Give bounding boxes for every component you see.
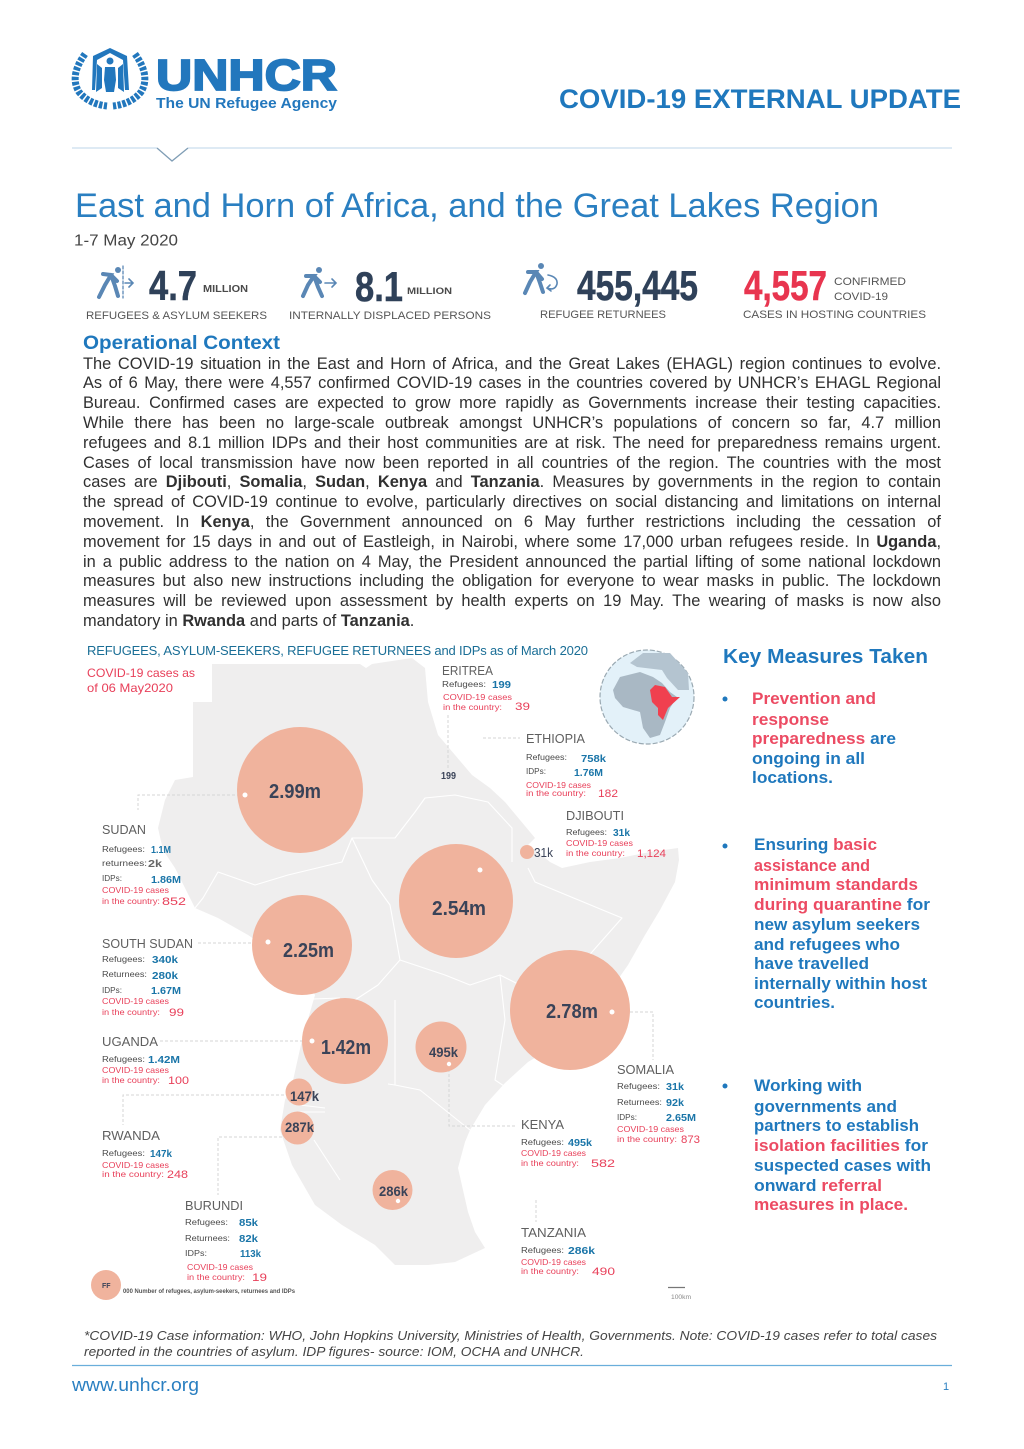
stat: internally displaced persons: MILLION bbox=[407, 286, 452, 296]
measure 2: minimum standards bbox=[754, 876, 918, 894]
bubble: South Sudan: 2.25m bbox=[283, 940, 334, 962]
measure 3: Working with bbox=[754, 1077, 862, 1095]
measure 1: response bbox=[752, 711, 829, 729]
measure 1 bbox=[722, 690, 896, 787]
country: Burundi: Refugees: bbox=[185, 1217, 228, 1227]
map legend: 000 Number of refugees, asylum-seekers, returnees and IDPs bbox=[123, 1288, 295, 1295]
country: Tanzania: 490 bbox=[592, 1266, 615, 1278]
country: Uganda: 100 bbox=[168, 1075, 189, 1087]
measure 2: and refugees who bbox=[754, 936, 900, 954]
country: Somalia: COVID-19 cases bbox=[617, 1124, 684, 1134]
map heading: REFUGEES, ASYLUM-SEEKERS, REFUGEE RETURNEES and IDPs as of March 2020 bbox=[87, 643, 588, 658]
country: Ethiopia: ETHIOPIA bbox=[526, 731, 585, 746]
title: East and Horn of Africa, and the Great Lakes Region bbox=[75, 187, 879, 225]
text block: operational context paragraph: refugees and 8.1 million IDPs and their host communities are at risk. The need for preparedness remains urgent. bbox=[83, 434, 941, 452]
stat: confirmed COVID-19 cases: COVID-19 bbox=[834, 291, 888, 303]
country: Burundi: 85k bbox=[239, 1218, 258, 1229]
country: Djibouti: Refugees: bbox=[566, 827, 607, 837]
leader lines bbox=[123, 715, 653, 1222]
country: Tanzania bbox=[521, 1225, 615, 1278]
map: region with bubbles bbox=[123, 658, 679, 1265]
country: Kenya: in the country: bbox=[521, 1158, 579, 1168]
country: Tanzania: COVID-19 cases bbox=[521, 1257, 586, 1267]
measure 2: Ensuring basic bbox=[754, 836, 877, 854]
country: Eritrea bbox=[442, 663, 530, 713]
measure 2: countries. bbox=[754, 994, 835, 1012]
country: Sudan: 852 bbox=[162, 896, 186, 908]
bubble: Djibouti: 31k bbox=[534, 845, 553, 860]
country: Somalia: in the country: bbox=[617, 1134, 677, 1144]
text block: operational context paragraph: in a public address to the nation on 4 May, the President announced the partial lifting of some national lockdown bbox=[83, 553, 941, 571]
country: Tanzania: 286k bbox=[568, 1246, 596, 1257]
footnote: reported in the countries of asylum. IDP figures- source: IOM, OCHA and UNHCR. bbox=[84, 1344, 584, 1359]
heading: key measures: Key Measures Taken bbox=[723, 646, 928, 668]
country: Uganda: COVID-19 cases bbox=[102, 1065, 169, 1075]
country: Somalia: 31k bbox=[666, 1082, 684, 1093]
country: Ethiopia: 182 bbox=[598, 788, 618, 800]
stat: confirmed COVID-19 cases: CASES IN HOSTING COUNTRIES bbox=[743, 309, 926, 321]
stat: refugee returnees bbox=[525, 262, 698, 321]
country: Eritrea: 39 bbox=[515, 701, 530, 713]
map legend bbox=[91, 1270, 295, 1300]
date: 1-7 May 2020 bbox=[74, 232, 178, 250]
stat: internally displaced persons: 8.1 bbox=[355, 263, 403, 310]
measure 3 bbox=[722, 1077, 931, 1214]
country: South Sudan: 1.67M bbox=[151, 986, 181, 997]
country: Kenya: 582 bbox=[591, 1158, 615, 1170]
country: Rwanda: in the country: bbox=[102, 1169, 164, 1179]
bubble: Kenya: 495k bbox=[429, 1044, 458, 1060]
bubble: South Sudan bbox=[252, 895, 352, 995]
measure 1: preparedness are bbox=[752, 730, 896, 748]
country: Ethiopia: Refugees: bbox=[526, 752, 567, 762]
country: Rwanda bbox=[102, 1128, 188, 1181]
country: Uganda: Refugees: bbox=[102, 1054, 145, 1064]
footer url: www.unhcr.org bbox=[71, 1375, 199, 1395]
country: Ethiopia: 1.76M bbox=[574, 768, 603, 779]
stat: internally displaced persons bbox=[289, 263, 491, 322]
country: Sudan: 1.86M bbox=[151, 875, 181, 886]
text block: operational context paragraph: movement. In Kenya, the Government announced on 6 May further restrictions including the cessation of bbox=[83, 513, 941, 531]
country: Somalia: SOMALIA bbox=[617, 1062, 674, 1077]
country: Kenya: Refugees: bbox=[521, 1137, 564, 1147]
country: Sudan: COVID-19 cases bbox=[102, 885, 169, 895]
measure 2: internally within host bbox=[754, 975, 928, 993]
country: Uganda: UGANDA bbox=[102, 1034, 158, 1049]
heading: operational context: Operational Context bbox=[83, 332, 281, 354]
icon: person walking with arrow bbox=[303, 267, 336, 296]
country: Ethiopia: in the country: bbox=[526, 788, 586, 798]
country: Burundi: Returnees: bbox=[185, 1233, 230, 1243]
bubble: Uganda bbox=[302, 998, 388, 1084]
country: South Sudan: COVID-19 cases bbox=[102, 996, 169, 1006]
bubble: Somalia bbox=[510, 950, 630, 1070]
bubble value: Eritrea: 199 bbox=[441, 771, 456, 782]
country: Sudan: 1.1M bbox=[151, 845, 171, 856]
measure 3: partners to establish bbox=[754, 1117, 919, 1135]
country: Somalia: IDPs: bbox=[617, 1112, 637, 1122]
map country borders bbox=[195, 795, 622, 1180]
bubble: Burundi bbox=[281, 1112, 314, 1144]
stat: confirmed COVID-19 cases: 4,557 bbox=[744, 262, 827, 309]
country: Rwanda: RWANDA bbox=[102, 1128, 160, 1143]
stat: refugees and asylum seekers: 4.7 bbox=[149, 262, 197, 309]
country: Sudan: 2k bbox=[148, 859, 163, 870]
header rule with chevron bbox=[72, 148, 952, 161]
inset globe bbox=[600, 650, 694, 744]
country: Rwanda: 248 bbox=[167, 1169, 188, 1181]
measure 1: locations. bbox=[752, 769, 833, 787]
text block: operational context paragraph: Bureau. Confirmed cases are expected to grow more rapidly as Governments increase their testing capacities. bbox=[83, 394, 941, 412]
measure 2: assistance and bbox=[754, 857, 870, 875]
measure 3: suspected cases with bbox=[754, 1157, 931, 1175]
stat: refugee returnees: 455,445 bbox=[577, 262, 698, 309]
country: Ethiopia bbox=[526, 731, 618, 800]
country: Burundi: BURUNDI bbox=[185, 1198, 243, 1213]
stat: refugees and asylum seekers: REFUGEES & ASYLUM SEEKERS bbox=[86, 310, 267, 322]
country: South Sudan: 99 bbox=[169, 1007, 184, 1019]
country: South Sudan: 280k bbox=[152, 971, 179, 982]
country: Burundi: in the country: bbox=[187, 1272, 245, 1282]
text block: operational context paragraph: Cases of local transmission have now been reported in all countries of the region. The countries with the most bbox=[83, 454, 941, 472]
country: Sudan: SUDAN bbox=[102, 822, 146, 837]
text block: operational context paragraph: The COVID-19 situation in the East and Horn of Africa, and the Great Lakes (EHAGL) region continues to evolve. bbox=[83, 354, 941, 372]
country: South Sudan: Refugees: bbox=[102, 954, 145, 964]
country: Tanzania: Refugees: bbox=[521, 1245, 564, 1255]
globe: Africa bbox=[613, 672, 677, 738]
wordmark: UNHCR bbox=[156, 51, 337, 100]
country: Tanzania: TANZANIA bbox=[521, 1225, 586, 1240]
bubble: Ethiopia: 2.54m bbox=[432, 898, 486, 920]
country: Sudan: returnees: bbox=[102, 858, 147, 868]
country: Burundi: IDPs: bbox=[185, 1248, 207, 1258]
text block: operational context paragraph: mandatory in Rwanda and parts of Tanzania. bbox=[83, 612, 414, 630]
country: Kenya: 495k bbox=[568, 1138, 592, 1149]
country: Djibouti: 31k bbox=[613, 828, 630, 839]
country: Somalia: Refugees: bbox=[617, 1081, 660, 1091]
country: Ethiopia: COVID-19 cases bbox=[526, 780, 591, 790]
country: South Sudan: IDPs: bbox=[102, 985, 122, 995]
country: Eritrea: 199 bbox=[492, 680, 511, 691]
map subheading: covid date: COVID-19 cases as bbox=[87, 666, 195, 680]
bubble: Rwanda: 147k bbox=[290, 1088, 319, 1104]
country: Sudan: Refugees: bbox=[102, 844, 145, 854]
country: Somalia: Returnees: bbox=[617, 1097, 662, 1107]
text block: operational context paragraph: movement for 15 days in and out of Eastleigh, in Nairobi, where some 17,000 urban refugees reside. In Uganda, bbox=[83, 533, 941, 551]
country: Uganda: in the country: bbox=[102, 1075, 160, 1085]
country: Somalia bbox=[617, 1062, 700, 1146]
footnote: *COVID-19 Case information: WHO, John Hopkins University, Ministries of Health, Governments. Note: COVID-19 cases refer to total cases bbox=[84, 1328, 938, 1343]
measure 2: new asylum seekers bbox=[754, 916, 920, 934]
measure 1: Prevention and bbox=[752, 690, 876, 708]
country: Rwanda: 147k bbox=[150, 1149, 172, 1160]
text block: operational context paragraph: measures but also new instructions including the obligation for everyone to wear masks in public. The lockdown bbox=[83, 572, 941, 590]
measure 2: have travelled bbox=[754, 955, 869, 973]
globe: Eurasia bbox=[630, 653, 689, 690]
country: Somalia: 2.65M bbox=[666, 1113, 696, 1124]
country: Rwanda: COVID-19 cases bbox=[102, 1160, 169, 1170]
country: Eritrea: COVID-19 cases bbox=[443, 692, 512, 702]
document label: COVID-19 EXTERNAL UPDATE bbox=[559, 84, 961, 114]
tagline: The UN Refugee Agency bbox=[156, 96, 337, 112]
page number: 1 bbox=[943, 1381, 949, 1393]
icon: person with return arrow bbox=[525, 263, 557, 293]
country: Eritrea: in the country: bbox=[443, 702, 502, 712]
bubble: Kenya bbox=[416, 1022, 466, 1072]
country: Sudan: in the country: bbox=[102, 896, 160, 906]
map scale bar bbox=[668, 1288, 691, 1301]
country: Ethiopia: IDPs: bbox=[526, 766, 546, 776]
measure 2 bbox=[722, 836, 931, 1012]
country: Tanzania: in the country: bbox=[521, 1266, 579, 1276]
country: Djibouti: COVID-19 cases bbox=[566, 838, 633, 848]
country: Burundi: 113k bbox=[240, 1249, 261, 1260]
country: Burundi bbox=[185, 1198, 267, 1284]
country: Djibouti bbox=[566, 808, 666, 860]
panel: key measures taken bbox=[722, 646, 931, 1214]
icon: UNHCR emblem bbox=[75, 48, 145, 106]
bubble: Sudan: 2.99m bbox=[269, 781, 321, 803]
bubble: Djibouti bbox=[520, 845, 553, 860]
text block: operational context paragraph: As of 6 May, there were 4,557 confirmed COVID-19 cases in the countries covered by UNHCR’s EHAGL Regional bbox=[83, 374, 941, 392]
stat: confirmed COVID-19 cases: CONFIRMED bbox=[834, 276, 906, 288]
country: Sudan bbox=[102, 822, 186, 908]
text block: operational context paragraph: cases are Djibouti, Somalia, Sudan, Kenya and Tanzania. Measures by governments in the region to contain bbox=[83, 473, 941, 491]
text block: operational context paragraph: the spread of COVID-19 continue to evolve, particularly directives on social distancing and limitations on internal bbox=[83, 493, 941, 511]
measure 2: during quarantine for bbox=[754, 896, 931, 914]
map legend: FF bbox=[102, 1283, 111, 1290]
stat: confirmed COVID-19 cases bbox=[743, 262, 926, 321]
country: South Sudan: Returnees: bbox=[102, 969, 147, 979]
UNHCR logo bbox=[75, 48, 337, 112]
country: Uganda bbox=[102, 1034, 189, 1087]
text block: operational context paragraph: While there has been no large-scale outbreak amongst UNHCR’s populations of concern so far, 4.7 million bbox=[83, 414, 941, 432]
country: South Sudan bbox=[102, 936, 193, 1019]
country: Eritrea: Refugees: bbox=[442, 679, 486, 689]
bubble: Uganda: 1.42m bbox=[321, 1037, 371, 1059]
bubble: Tanzania bbox=[372, 1170, 412, 1210]
country: Djibouti: in the country: bbox=[566, 848, 625, 858]
stat: refugees and asylum seekers: MILLION bbox=[203, 283, 248, 295]
country: Burundi: COVID-19 cases bbox=[187, 1262, 253, 1272]
bubble: Rwanda bbox=[286, 1078, 319, 1106]
map scale bar: 100km bbox=[671, 1295, 691, 1301]
measure 3: governments and bbox=[754, 1098, 897, 1116]
country: Somalia: 873 bbox=[681, 1134, 700, 1146]
country: South Sudan: SOUTH SUDAN bbox=[102, 936, 193, 951]
stat: internally displaced persons: INTERNALLY DISPLACED PERSONS bbox=[289, 310, 491, 322]
bubble: Ethiopia bbox=[399, 844, 513, 958]
map subheading: covid date: of 06 May2020 bbox=[87, 681, 173, 695]
country: Burundi: 82k bbox=[239, 1234, 258, 1245]
footer rule bbox=[72, 1364, 952, 1366]
stat: refugees and asylum seekers bbox=[86, 262, 267, 322]
measure 3: isolation facilities for bbox=[754, 1137, 929, 1155]
bubble: Sudan bbox=[237, 727, 363, 853]
text block: operational context paragraph bbox=[83, 354, 941, 630]
icon: person crossing border bbox=[99, 266, 133, 298]
country: South Sudan: in the country: bbox=[102, 1007, 160, 1017]
country: Uganda: 1.42M bbox=[148, 1055, 180, 1066]
bubble: Burundi: 287k bbox=[285, 1119, 314, 1135]
map landmass bbox=[158, 658, 679, 1265]
country: Djibouti: 1,124 bbox=[637, 848, 666, 860]
country: Burundi: 19 bbox=[252, 1272, 267, 1284]
bubble: Tanzania: 286k bbox=[379, 1183, 408, 1199]
country: Djibouti: DJIBOUTI bbox=[566, 808, 624, 823]
stat: refugee returnees: REFUGEE RETURNEES bbox=[540, 309, 666, 321]
text block: operational context paragraph: measures will be reviewed upon assessment by health experts on 19 May. The wearing of masks is now also bbox=[83, 592, 941, 610]
country: Ethiopia: 758k bbox=[581, 754, 606, 765]
country: Somalia: 92k bbox=[666, 1098, 684, 1109]
map subheading: covid date bbox=[87, 666, 195, 695]
globe: highlighted region bbox=[650, 685, 680, 720]
country: Eritrea: ERITREA bbox=[442, 663, 493, 678]
footnote bbox=[84, 1328, 938, 1359]
country: Kenya: COVID-19 cases bbox=[521, 1148, 586, 1158]
measure 1: ongoing in all bbox=[752, 750, 865, 768]
measure 3: measures in place. bbox=[754, 1196, 908, 1214]
bubble: Somalia: 2.78m bbox=[546, 1001, 598, 1023]
country: Sudan: IDPs: bbox=[102, 873, 122, 883]
country: Kenya bbox=[521, 1117, 615, 1170]
country: South Sudan: 340k bbox=[152, 955, 179, 966]
country: Kenya: KENYA bbox=[521, 1117, 564, 1132]
country: Rwanda: Refugees: bbox=[102, 1148, 145, 1158]
measure 3: onward referral bbox=[754, 1177, 882, 1195]
